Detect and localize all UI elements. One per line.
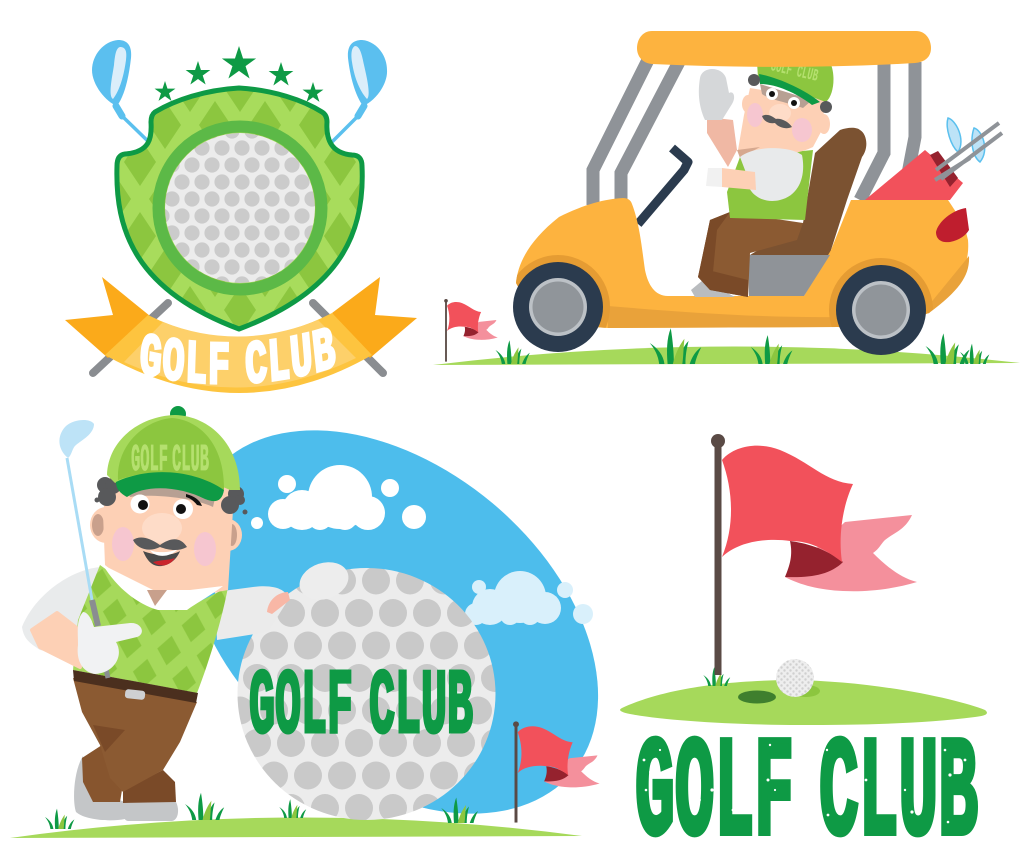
- head: [738, 88, 825, 155]
- grass tufts: [45, 793, 478, 829]
- shirt sleeve: [740, 148, 803, 201]
- distressed texture: [643, 744, 966, 823]
- golf ball: [776, 659, 814, 697]
- hand on ball: [267, 592, 290, 614]
- cap: [757, 57, 833, 105]
- ground: [10, 817, 582, 838]
- cheeks: [112, 527, 216, 566]
- head: [103, 478, 233, 604]
- collar: [103, 565, 223, 610]
- front wheel: [513, 262, 603, 352]
- buckle: [125, 689, 145, 700]
- mustache: [133, 538, 187, 550]
- big golf ball: [238, 568, 496, 820]
- ball shadow: [792, 685, 820, 697]
- steering wheel: [638, 148, 688, 224]
- panel: golf club badge: [65, 40, 417, 393]
- waving glove: [699, 69, 734, 120]
- mouth: [143, 549, 180, 566]
- eyes: [130, 494, 202, 519]
- small flag: [444, 299, 498, 362]
- shoe: [691, 280, 735, 297]
- golf bag: [865, 118, 1002, 200]
- forehead: [125, 485, 218, 507]
- cloud: [465, 571, 593, 625]
- lower leg: [123, 770, 176, 803]
- club: [59, 420, 108, 678]
- glove on ball: [295, 556, 353, 606]
- tail light: [936, 208, 969, 242]
- panel: golfer with ball: [10, 353, 672, 860]
- rear wheel: [836, 265, 926, 355]
- cap: GOLF CLUB: [769, 57, 820, 87]
- golf ball: [165, 133, 315, 283]
- chest: [737, 147, 760, 158]
- belt: [73, 670, 198, 703]
- shield: [117, 88, 362, 329]
- hole: [738, 690, 776, 704]
- nose: [142, 513, 182, 543]
- nose: [769, 104, 791, 122]
- ears: [742, 95, 830, 134]
- flag: [711, 434, 917, 675]
- small flag: [513, 721, 600, 823]
- seat base: [748, 255, 830, 296]
- cap: CLUB: [172, 439, 209, 482]
- back leg: [82, 738, 125, 802]
- cart body: [516, 198, 970, 328]
- front leg: [73, 678, 197, 792]
- ground: [433, 346, 1020, 365]
- panel: golfer with ball: CLUB: [369, 656, 473, 760]
- cheeks: [747, 103, 812, 142]
- vest: [73, 565, 228, 693]
- shoes: [74, 756, 178, 821]
- cap: [107, 406, 240, 501]
- ball text: GOLF: [249, 656, 353, 760]
- cuff: [706, 168, 722, 187]
- ribbon text: GOLF CLUB: [140, 327, 336, 385]
- panel: golf cart: [433, 31, 1020, 365]
- mustache: [762, 115, 792, 128]
- blue backdrop: [114, 353, 672, 860]
- wheel arches: [516, 255, 932, 328]
- forward arm: [722, 168, 756, 190]
- hair: [748, 74, 832, 113]
- hair: [94, 477, 248, 514]
- waving arm: [707, 117, 737, 167]
- cloud: [251, 465, 426, 530]
- trousers: [698, 212, 803, 297]
- glove: [78, 612, 142, 674]
- stars: [155, 46, 323, 102]
- seat back: [750, 128, 866, 255]
- green: [620, 680, 987, 725]
- chest hair: [147, 590, 167, 606]
- grass tufts: [496, 328, 989, 364]
- panel: flag on green: [620, 434, 987, 860]
- trouser shade: [698, 212, 748, 297]
- golfer: [22, 406, 353, 821]
- vest: [727, 150, 813, 220]
- ears: [90, 507, 242, 551]
- forearm: [32, 613, 83, 667]
- eyes: [766, 88, 800, 109]
- shield ring: [158, 126, 322, 290]
- forehead: [760, 84, 812, 108]
- trouser shadow: [93, 725, 125, 752]
- cart posts: [593, 60, 915, 205]
- grass tuft: [703, 667, 730, 686]
- ribbon: [65, 277, 417, 393]
- crossed clubs: [92, 40, 387, 373]
- right arm sleeve: [215, 586, 288, 640]
- driver: [691, 57, 833, 297]
- left sleeve: [22, 567, 100, 657]
- cart roof: [637, 31, 931, 67]
- cap: GOLF: [131, 439, 168, 482]
